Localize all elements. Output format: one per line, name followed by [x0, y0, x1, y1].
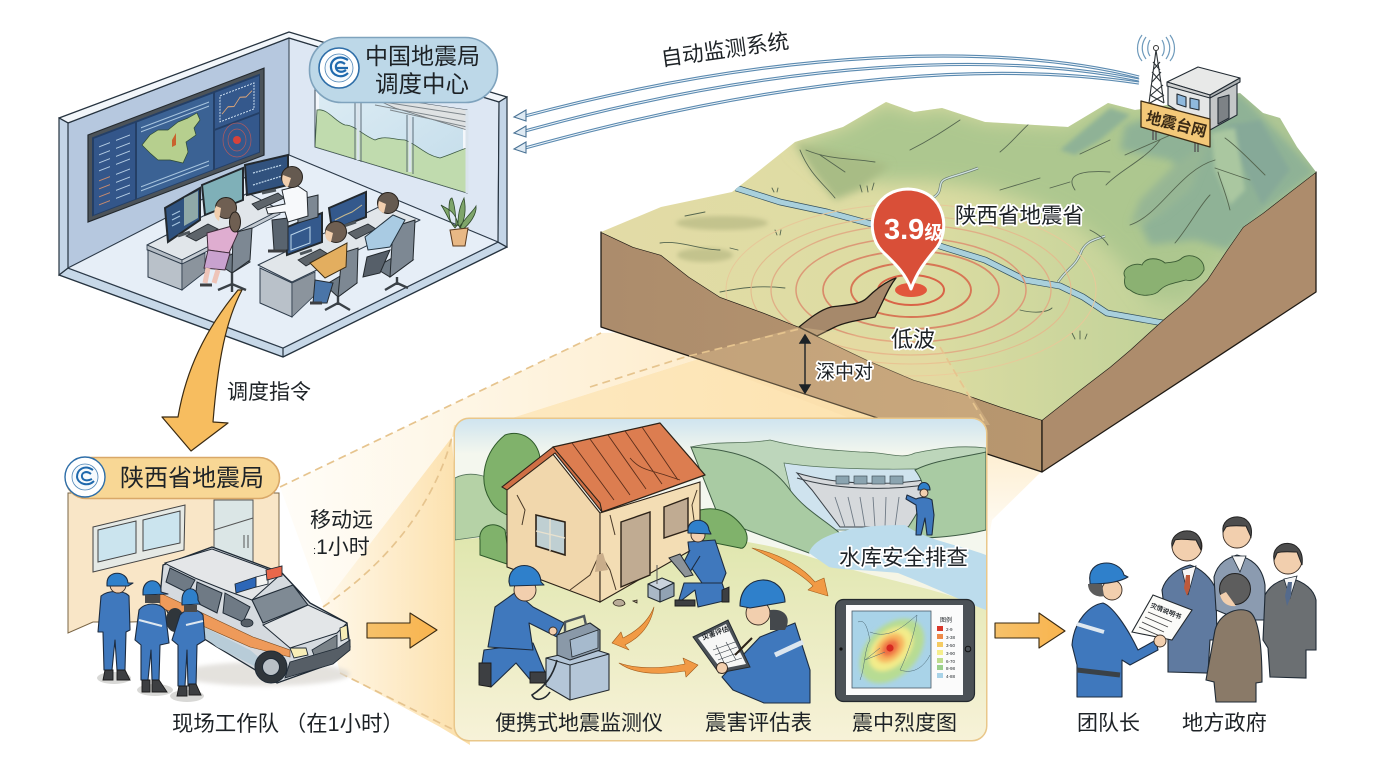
official in light grey suit — [1214, 517, 1265, 620]
badge title: 中国地震局 — [365, 43, 480, 69]
dam — [797, 473, 940, 527]
plant — [441, 198, 476, 246]
label: field team: 现场工作队 （在1小时） — [172, 712, 404, 736]
intensity map — [852, 610, 932, 688]
terrain right soil face — [1042, 172, 1316, 472]
house window — [536, 515, 565, 555]
hills around dam — [691, 447, 842, 553]
label: local government: 地方政府 — [1182, 711, 1267, 735]
kneeling inspector by house — [669, 520, 729, 607]
bush — [1124, 256, 1204, 295]
label: dispatch order: 调度指令 — [227, 381, 311, 404]
operator: man in blue — [363, 192, 415, 290]
official in blue-grey suit — [1162, 531, 1217, 673]
worker C — [170, 589, 205, 702]
room shell — [59, 32, 507, 357]
inspector with assessment tablet — [693, 580, 810, 703]
legend: 4-88 — [946, 674, 956, 679]
label: depth: 深中对 — [816, 361, 873, 383]
roof light bar — [235, 566, 282, 593]
operator: person in yellow — [310, 222, 358, 310]
radio tower — [1138, 35, 1174, 103]
depth arrow — [800, 335, 810, 393]
terrain scratches — [800, 115, 1265, 245]
tablet heading: 灾害评估 — [701, 624, 730, 642]
sign posts — [1153, 125, 1198, 152]
portable seismograph — [532, 616, 609, 700]
river — [809, 525, 986, 610]
dispatch arrow — [162, 290, 242, 451]
fan tint over soil — [690, 327, 990, 425]
legend: 3-38 — [946, 635, 956, 640]
label: team leader: 团队长 — [1077, 712, 1140, 735]
kneeling inspector with instrument — [479, 566, 564, 687]
label: one hour: :1小时 — [313, 536, 370, 559]
tree — [480, 433, 747, 565]
field survey panel — [455, 419, 986, 740]
monitoring signal arcs — [514, 56, 1139, 153]
terrain front-left soil face — [601, 232, 1042, 472]
house door — [621, 512, 650, 587]
worker B — [135, 581, 173, 696]
label: province: 陕西省地震省 — [955, 204, 1084, 228]
window with hills — [315, 88, 467, 193]
terrain block — [600, 90, 1320, 472]
worker A — [97, 573, 133, 684]
arrow between field team and panel — [367, 613, 437, 648]
terrain top surface — [600, 90, 1320, 425]
label: portable seismograph: 便携式地震监测仪 — [495, 712, 663, 735]
arrow to local government — [995, 613, 1065, 648]
badge: Shaanxi bureau — [65, 457, 280, 498]
label: reservoir inspection: 水库安全排查 — [839, 546, 968, 570]
seismic rings — [726, 204, 1096, 376]
badge subtitle: 调度中心 — [375, 71, 469, 97]
orange flow arrows — [612, 548, 828, 677]
control room — [59, 32, 507, 357]
map of China — [142, 113, 200, 163]
legend — [937, 616, 956, 679]
car body — [160, 547, 350, 683]
epicentre pin — [872, 189, 944, 289]
label: automatic monitoring: 自动监测系统 — [659, 29, 790, 71]
magnitude text: 3.9级 — [884, 214, 943, 246]
label: low wave: 低波 — [891, 327, 935, 352]
legend: 2-9 — [946, 627, 953, 632]
desks — [147, 193, 420, 317]
wall cracks — [517, 490, 697, 590]
logo — [319, 48, 359, 88]
reservoir — [784, 462, 920, 530]
label: intensity map: 震中烈度图 — [852, 712, 957, 735]
office building — [68, 493, 279, 633]
provincial office — [65, 457, 280, 633]
rings on video wall — [223, 123, 251, 157]
badge: China seismological dispatch centre — [310, 38, 498, 102]
label: damage assessment form: 震害评估表 — [705, 711, 812, 735]
sky — [455, 419, 986, 559]
team leader — [1072, 563, 1192, 697]
zoom dashed lines — [280, 329, 985, 730]
badge title: 陕西省地震局 — [120, 465, 264, 492]
official in dark grey suit — [1263, 543, 1316, 678]
monitors — [165, 155, 376, 266]
field team — [97, 573, 205, 702]
label: seismic network: 地震台网 — [1144, 107, 1209, 141]
rubble — [613, 599, 637, 606]
legend: 8-98 — [946, 666, 956, 671]
station building — [1167, 67, 1240, 130]
dam inspector — [906, 482, 934, 535]
operator: man in white — [266, 166, 318, 251]
legend: 图例 — [940, 616, 952, 624]
legend: 3-50 — [946, 643, 956, 648]
label: moving team: 移动远 — [310, 509, 373, 532]
epicentre marker on map — [172, 133, 176, 147]
response vehicle — [160, 547, 350, 686]
station sign — [1141, 101, 1210, 147]
house right window — [664, 498, 688, 538]
distant hills — [455, 474, 506, 540]
house — [502, 423, 705, 602]
magnifier fan: zoom beam from the epicentre to the field panel — [280, 327, 1041, 745]
report document: 灾情说明书 — [1149, 601, 1183, 621]
video wall — [88, 68, 264, 222]
local government officials — [1162, 517, 1316, 702]
terrain crack — [799, 278, 896, 336]
intensity tablet — [836, 600, 974, 702]
river — [736, 188, 1163, 323]
official facing away — [1206, 574, 1262, 702]
legend: 3-90 — [946, 651, 956, 656]
ground — [455, 531, 986, 740]
legend: 6-70 — [946, 659, 956, 664]
small sensor box — [648, 565, 674, 602]
operator: woman in pink — [200, 198, 252, 292]
logo — [65, 457, 105, 497]
seismic station — [1138, 35, 1240, 152]
